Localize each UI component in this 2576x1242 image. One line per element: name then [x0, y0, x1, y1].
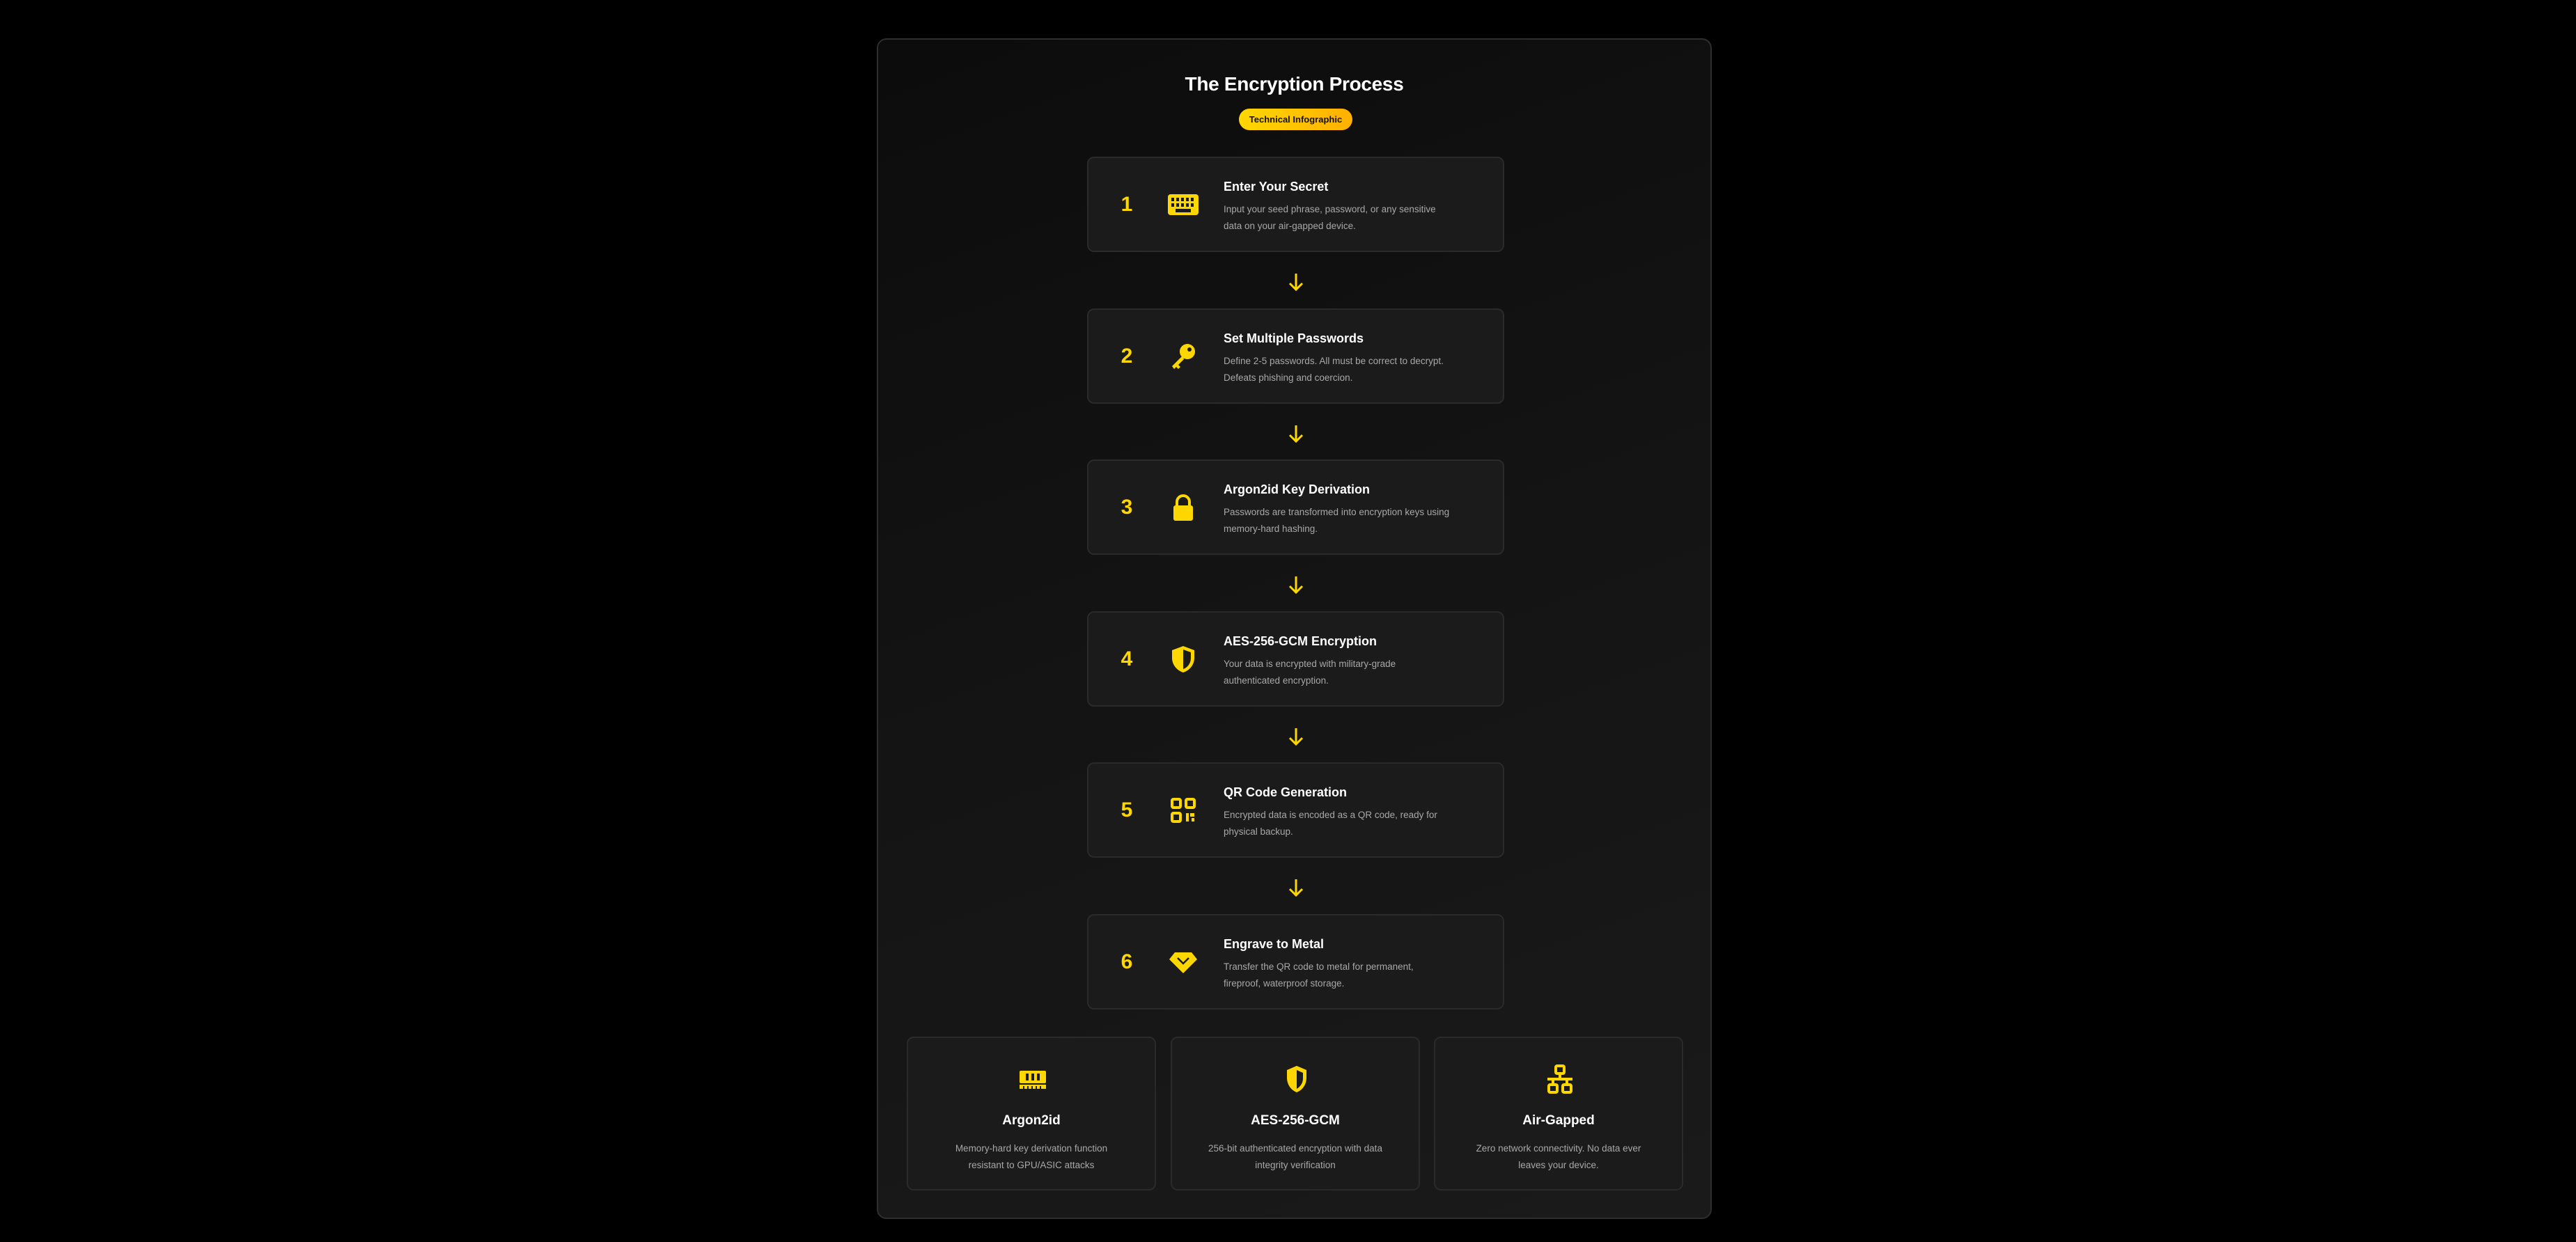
badge: Technical Infographic	[1249, 114, 1342, 125]
step 4 card: authenticated encryption.	[1224, 675, 1329, 686]
feature card: Argon2id: Memory-hard key derivation function	[955, 1143, 1107, 1154]
arrow	[1289, 879, 1303, 897]
icon: memory chip	[1020, 1071, 1046, 1089]
icon: qr code	[1171, 798, 1196, 823]
arrow	[1289, 274, 1303, 291]
badge	[1239, 109, 1352, 130]
step 5 card: QR Code Generation	[1224, 785, 1347, 799]
step 1 card: data on your air-gapped device.	[1224, 221, 1356, 231]
feature card: AES-256-GCM: AES-256-GCM	[1251, 1113, 1340, 1128]
feature card: Air-Gapped: leaves your device.	[1518, 1160, 1599, 1170]
feature card: Argon2id: resistant to GPU/ASIC attacks	[969, 1160, 1094, 1170]
feature card: Air-Gapped: Zero network connectivity. No data ever	[1476, 1143, 1641, 1154]
icon: keyboard	[1168, 194, 1199, 215]
step 5 card: physical backup.	[1224, 826, 1293, 837]
feature card: AES-256-GCM: 256-bit authenticated encryption with data	[1208, 1143, 1382, 1154]
step 2 card: Set Multiple Passwords	[1224, 331, 1364, 345]
panel: main container	[877, 38, 1712, 1219]
step 6 card: fireproof, waterproof storage.	[1224, 978, 1344, 989]
step 3 card: memory-hard hashing.	[1224, 524, 1318, 534]
feature card: Argon2id	[907, 1037, 1156, 1190]
step 3 card: Argon2id Key Derivation	[1224, 482, 1370, 496]
step 4 card: Your data is encrypted with military-grade	[1224, 659, 1396, 669]
step 3 card: Passwords are transformed into encryption keys using	[1224, 507, 1449, 517]
step 6 card: 6	[1121, 950, 1132, 973]
step 4 card: 4	[1121, 647, 1132, 670]
step 2 card	[1087, 308, 1504, 404]
icon: network	[1547, 1064, 1572, 1094]
icon: gem	[1169, 952, 1197, 973]
step 1 card: Input your seed phrase, password, or any sensitive	[1224, 204, 1436, 214]
step 5 card	[1087, 762, 1504, 858]
arrow	[1289, 425, 1303, 443]
arrow	[1289, 576, 1303, 594]
step 4 card: AES-256-GCM Encryption	[1224, 634, 1377, 648]
step 3 card: 3	[1121, 496, 1132, 519]
step 2 card: Defeats phishing and coercion.	[1224, 372, 1352, 383]
feature card: Air-Gapped: Air-Gapped	[1522, 1113, 1595, 1128]
icon: key	[1172, 344, 1195, 369]
step 5 card: Encrypted data is encoded as a QR code, ready for	[1224, 810, 1437, 820]
icon: shield	[1172, 646, 1194, 673]
feature card: Air-Gapped	[1434, 1037, 1683, 1190]
feature card: Argon2id: Argon2id	[1002, 1113, 1061, 1128]
step 3 card	[1087, 459, 1504, 555]
icon: shield	[1287, 1066, 1306, 1092]
step 6 card: Transfer the QR code to metal for permanent,	[1224, 961, 1414, 972]
step 1 card	[1087, 157, 1504, 252]
step 1 card: 1	[1121, 193, 1132, 216]
step 4 card	[1087, 611, 1504, 707]
feature card: AES-256-GCM: integrity verification	[1255, 1160, 1336, 1170]
title: The Encryption Process	[1185, 73, 1403, 95]
icon: lock	[1173, 494, 1193, 521]
step 6 card	[1087, 914, 1504, 1009]
step 1 card: Enter Your Secret	[1224, 180, 1328, 194]
step 2 card: Define 2-5 passwords. All must be correct to decrypt.	[1224, 356, 1444, 366]
step 2 card: 2	[1121, 345, 1132, 368]
step 5 card: 5	[1121, 799, 1132, 822]
step 6 card: Engrave to Metal	[1224, 937, 1324, 951]
feature card: AES-256-GCM	[1171, 1037, 1420, 1190]
arrow	[1289, 728, 1303, 746]
